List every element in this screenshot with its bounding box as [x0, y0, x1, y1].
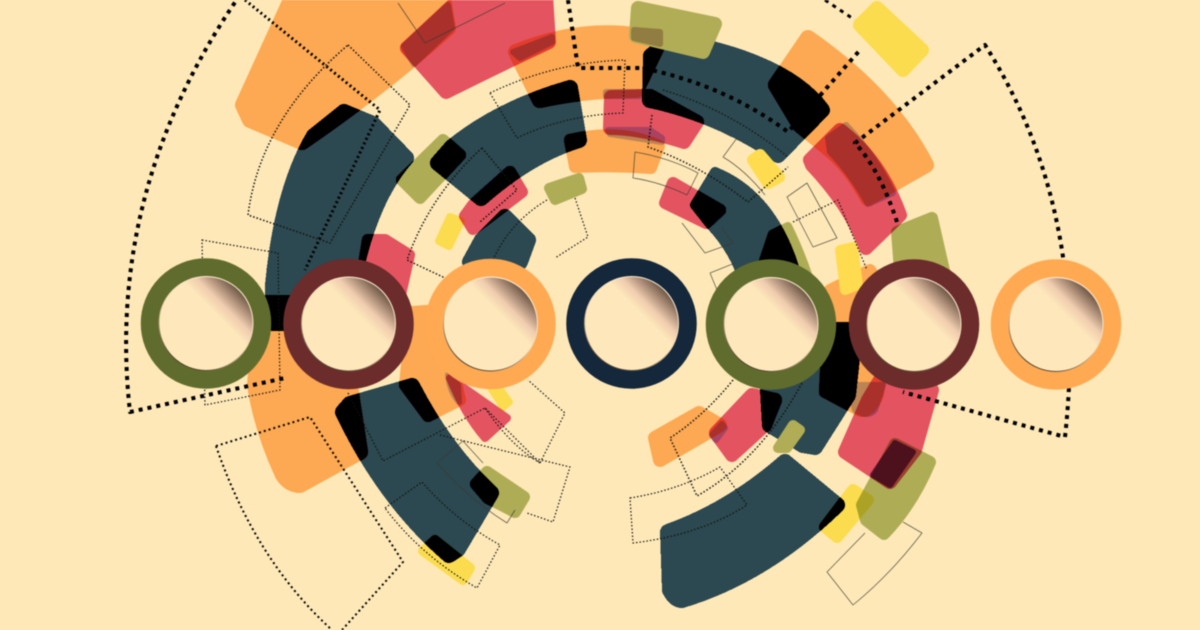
dotted outline: lower left wedge [216, 417, 403, 630]
arc: olive lower left [476, 472, 524, 512]
arc: yellow top right [860, 8, 922, 70]
arc: teal big left [273, 112, 406, 323]
arc: yellow right middle [840, 247, 858, 290]
arc: red top [407, 0, 549, 92]
outline: bottom right wedge [827, 522, 922, 605]
arc: olive left [402, 140, 460, 198]
dotted outline: bottom centre wedge [630, 467, 747, 543]
arc: red beside maroon ring [360, 240, 409, 295]
dotted outline: left medium wedge [248, 45, 410, 243]
arc: yellow small left [439, 217, 461, 246]
overlap: red on olive lower right [873, 443, 913, 485]
arc: teal inner small [470, 217, 528, 262]
arc: orange upper right [776, 38, 926, 198]
dotted outline: thick left wedge [126, 0, 285, 412]
arc: red diagonal [465, 172, 522, 229]
arc: orange top middle [516, 33, 660, 100]
overlap: olive on orange top [634, 30, 660, 44]
outline: grey box right [787, 183, 837, 247]
dotted outline: lower outer wedge [440, 435, 570, 522]
overlap: red on orange lower left [448, 375, 459, 402]
arc: red lower centre-left [450, 378, 507, 438]
dotted outline: side wedge left [202, 240, 280, 405]
ring: orange left [434, 268, 546, 380]
arc: yellow sliver [490, 388, 510, 408]
dotted outline: lower right arcs [670, 380, 802, 496]
dotted outline: left inner wedge [407, 148, 517, 278]
arc: orange centre [570, 135, 659, 168]
ring: navy centre [576, 268, 688, 380]
dotted outline: thick left upper [245, 0, 380, 270]
arc: teal middle [438, 88, 579, 198]
arc: olive strip [760, 226, 810, 280]
dotted outline: thick top [568, 0, 860, 132]
outline: grey box top left [398, 3, 505, 43]
arc: olive small [549, 178, 582, 200]
overlap: red on orange top left [404, 5, 452, 64]
arc: olive small lower centre [778, 425, 800, 448]
ring: orange right [1000, 268, 1112, 380]
dotted outline: right box [793, 200, 867, 270]
dotted outline: thick right wedge [855, 45, 1070, 437]
arc: orange right of rings [825, 270, 890, 411]
arc: yellow lower right [825, 490, 868, 537]
outline: thin lower wedge [437, 441, 515, 523]
outline: grey small near green ring [710, 263, 735, 290]
arc: olive lower right [862, 444, 930, 534]
dotted outline: lower wedges near teal [348, 380, 565, 463]
arc: teal inner right [695, 172, 795, 270]
dotted outline: upper teal arc [663, 90, 788, 157]
teal arcs [273, 40, 855, 600]
ring: olive right [715, 268, 827, 380]
arc: teal lower left [343, 386, 491, 555]
arc: yellow bottom left [423, 540, 470, 580]
dotted outline: thick top right corner [825, 0, 855, 20]
arc: teal upper right [650, 40, 822, 155]
overlap: red on orange centre top [606, 92, 640, 96]
overlap: red on orange centre [608, 130, 662, 142]
arc: teal lower right [768, 330, 855, 447]
overlap: red on orange right [853, 385, 883, 414]
arc: yellow right of top teal [753, 155, 779, 183]
ring: maroon right [858, 268, 970, 380]
overlap: red on orange top middle [513, 37, 552, 58]
dotted outline: right inner wedge [648, 115, 788, 202]
outline: grey box inner right [682, 223, 733, 253]
dotted outline: bottom wedge [385, 482, 500, 588]
arc: red centre top [610, 96, 697, 142]
arc: red small right of centre [665, 183, 720, 223]
arc: orange under middle ring [405, 310, 460, 416]
outline: grey arc top right [723, 138, 765, 195]
ring: olive left [150, 268, 262, 380]
arc: orange lower left [255, 303, 360, 485]
dotted outline: inner wedge [493, 198, 588, 260]
ring: maroon left [292, 268, 404, 380]
arc: teal bottom big [668, 462, 837, 600]
arc: orange lower centre [655, 413, 720, 460]
overlap: red on orange lower centre [712, 424, 725, 440]
arc: olive right [897, 218, 945, 275]
dotted outline: top centre wedge [490, 60, 625, 138]
overlap: red on orange upper right [828, 125, 893, 204]
arc: olive top [636, 8, 715, 52]
arc: red right lower [845, 380, 932, 482]
arc: orange top left [243, 0, 448, 142]
arc: red lower centre [716, 395, 775, 455]
arc: red upper right [810, 130, 900, 248]
outline: grey box centre [633, 152, 698, 195]
